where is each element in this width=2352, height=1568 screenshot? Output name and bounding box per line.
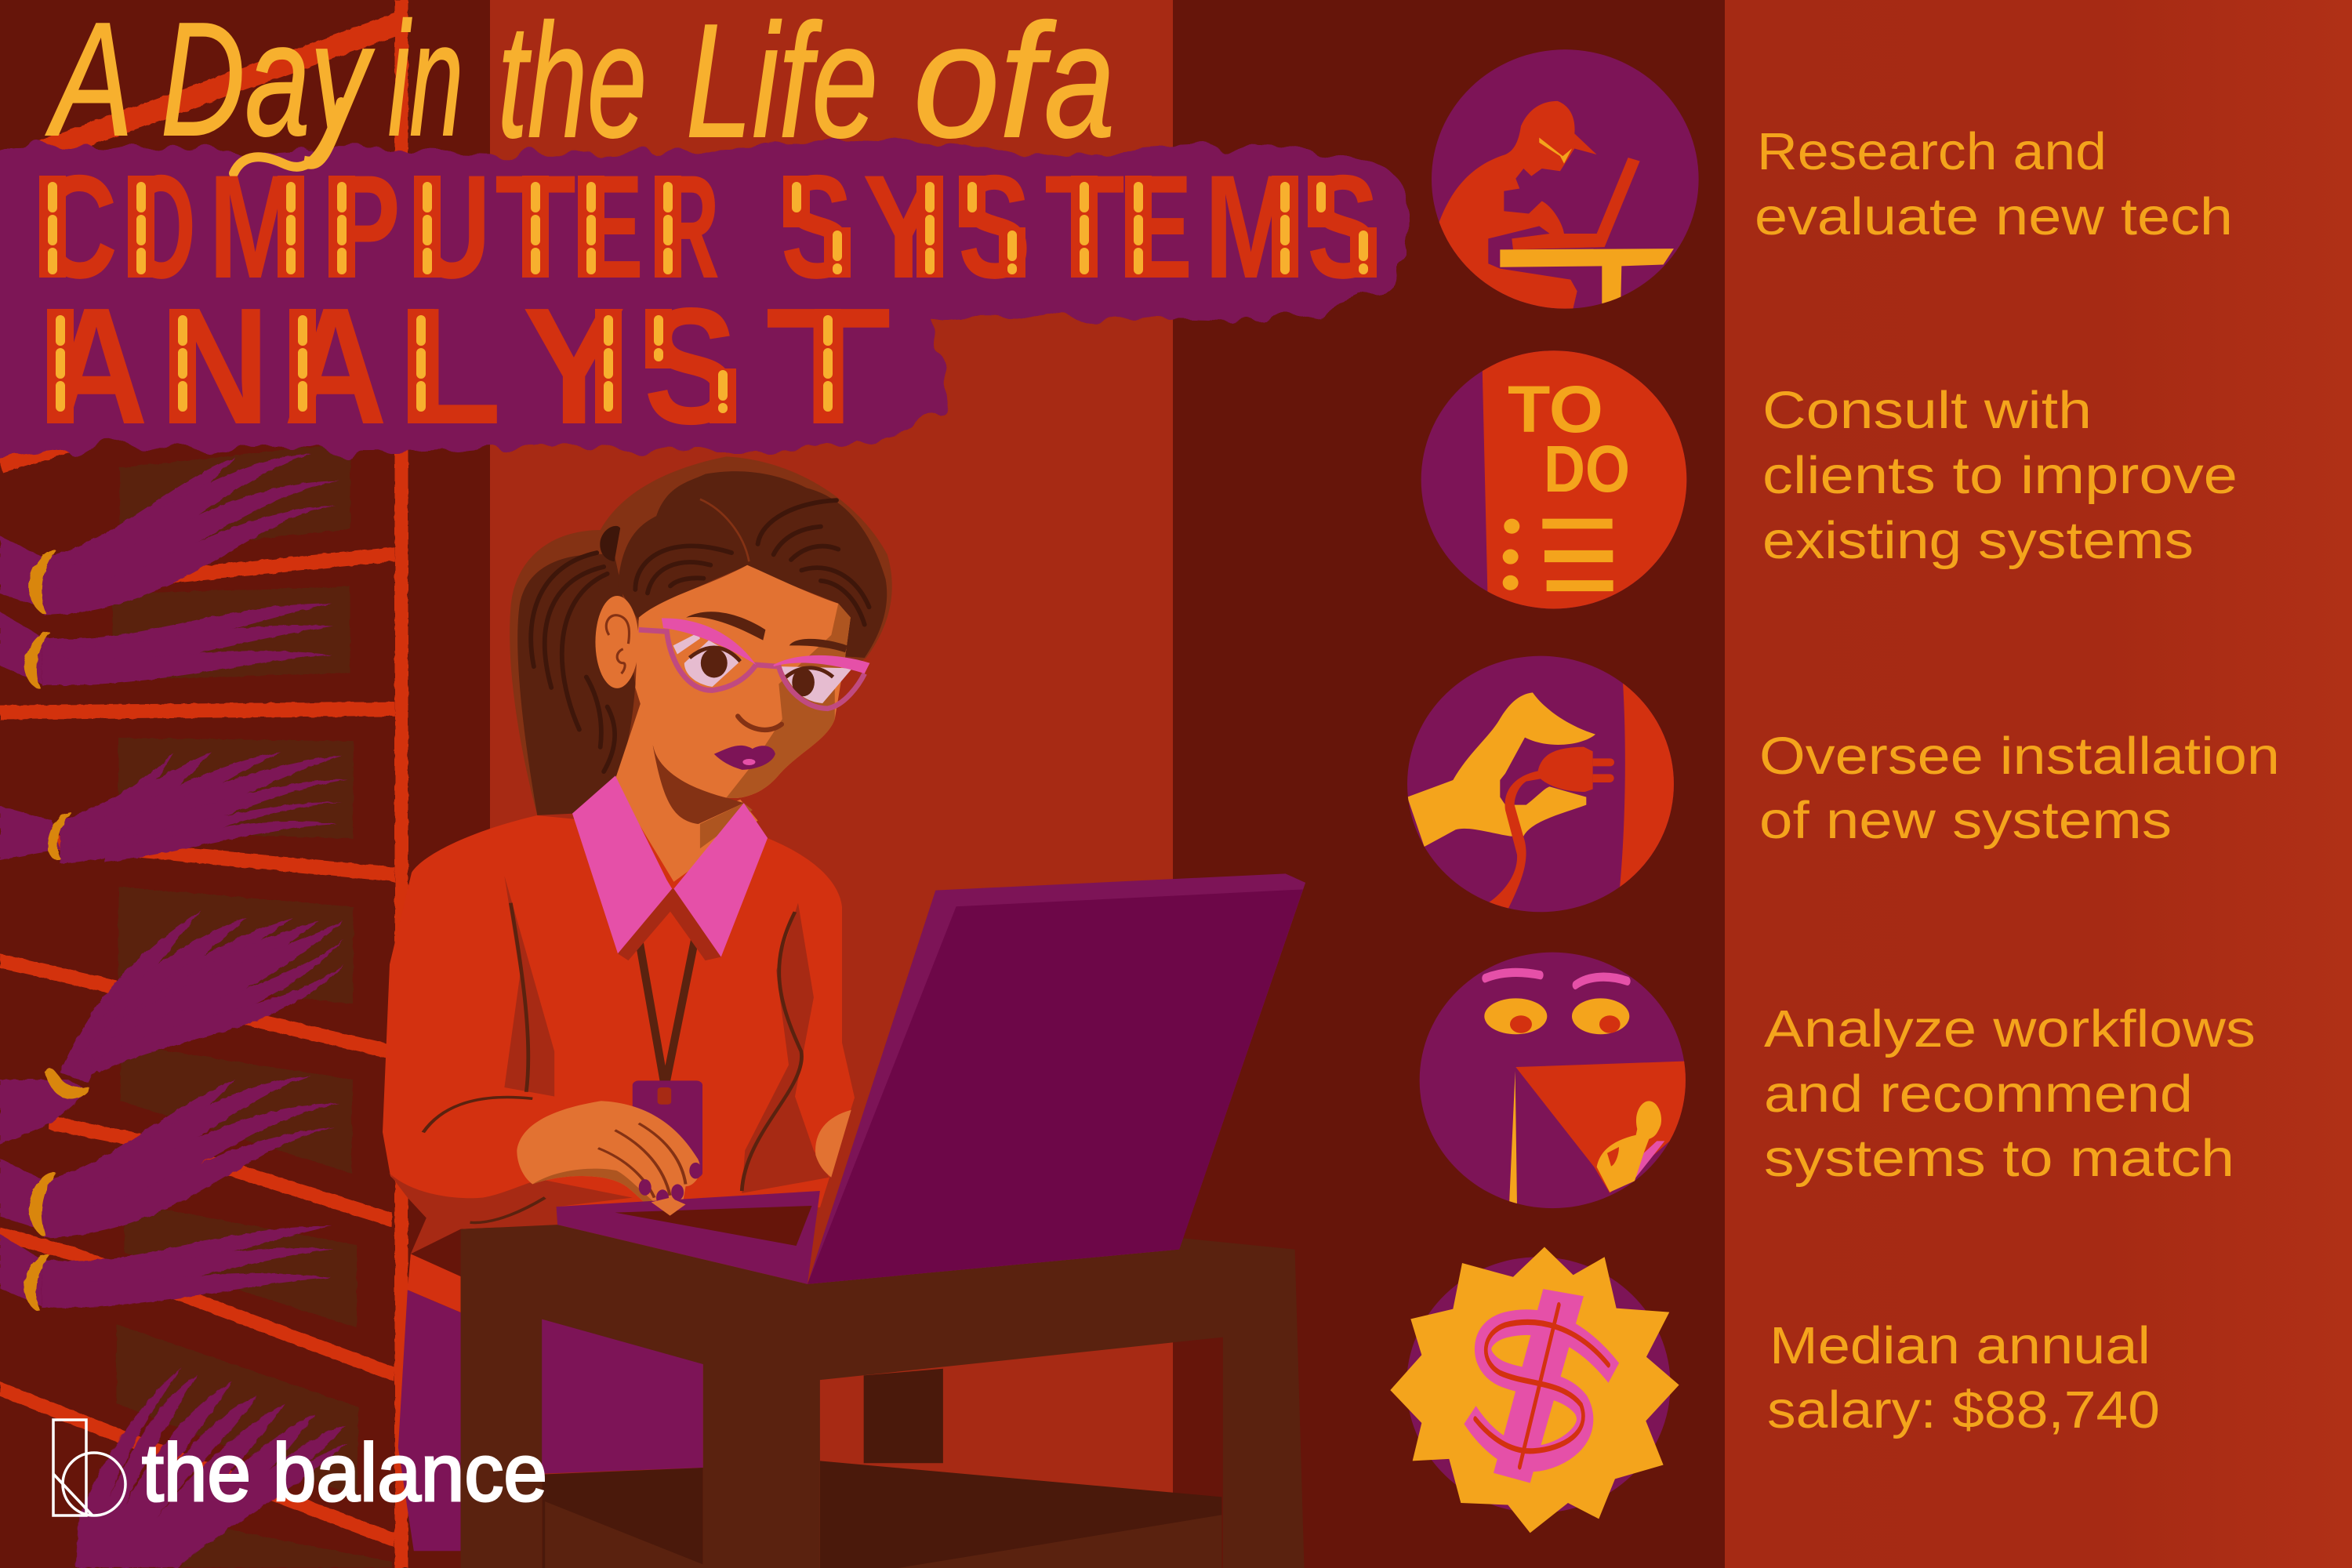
desk back leg and shelf xyxy=(542,1369,1221,1568)
trousers xyxy=(398,1290,703,1551)
list item: salary: salary: $88,740 xyxy=(1767,1381,2160,1439)
title: computer systems: T xyxy=(1044,144,1125,309)
title: analyst: A xyxy=(284,273,387,459)
lanyard xyxy=(637,923,698,1087)
hair parting xyxy=(700,499,749,561)
logo mark xyxy=(53,1420,125,1515)
cable bundles xyxy=(0,453,347,1567)
title: computer systems: E xyxy=(1127,144,1192,309)
title: analyst: T xyxy=(765,273,891,459)
to do label: TO xyxy=(1508,372,1603,446)
background: orange wall panel xyxy=(490,0,1173,1568)
title: computer systems: R xyxy=(657,144,720,309)
lips xyxy=(714,746,775,770)
background: right text panel xyxy=(1725,0,2352,1568)
title: analyst: N xyxy=(166,273,270,459)
title: computer systems: M xyxy=(209,144,302,309)
hair bun tie xyxy=(600,526,620,561)
title: computer systems: E xyxy=(578,144,644,309)
cable tassel 2 xyxy=(0,603,333,688)
cable tassel 6 xyxy=(0,1225,333,1311)
list item: consult: existing systems xyxy=(1762,511,2194,570)
collar xyxy=(572,775,768,957)
list item: research xyxy=(1755,122,2233,246)
left hand xyxy=(517,1101,700,1216)
person: analyst at laptop xyxy=(383,456,892,1551)
title: computer systems: S xyxy=(1307,144,1379,309)
nose xyxy=(738,717,782,730)
hair strands xyxy=(531,500,869,771)
title: computer systems: P xyxy=(328,144,401,309)
title: analyst: Y xyxy=(522,273,626,459)
list item: analyze: and recommend xyxy=(1764,1065,2193,1123)
desk xyxy=(461,1225,1305,1568)
title: analyst: L xyxy=(405,273,502,459)
hair outline xyxy=(510,456,892,815)
title: computer systems: Y xyxy=(862,144,945,309)
to do label xyxy=(1508,372,1630,506)
cable tassel 4 xyxy=(0,910,344,1145)
icon: researcher at laptop xyxy=(1432,49,1699,324)
logo wordmark: the balance xyxy=(142,1428,547,1519)
title: analyst: A xyxy=(45,273,148,459)
title script line xyxy=(45,0,1115,171)
top hair xyxy=(618,471,887,658)
laptop base xyxy=(557,1191,820,1284)
title: computer systems: S xyxy=(781,144,853,309)
ponytail xyxy=(517,554,635,815)
list item: oversee: Oversee installation xyxy=(1759,727,2280,786)
collar shadow xyxy=(618,889,721,960)
title: computer systems: S xyxy=(958,144,1031,309)
title: analyst xyxy=(45,273,891,459)
title: computer systems: M xyxy=(1204,144,1298,309)
title: computer systems: T xyxy=(495,144,576,309)
icon: salary dollar badge xyxy=(1390,1247,1679,1533)
list item: consult: clients to improve xyxy=(1762,446,2238,505)
title: analyst: S xyxy=(644,273,738,459)
server rack xyxy=(0,0,405,1568)
title banner xyxy=(0,143,1408,463)
title: computer systems: C xyxy=(36,144,118,309)
list item: salary: Median annual xyxy=(1769,1316,2151,1375)
list item: analyze: Analyze workflows xyxy=(1764,1000,2256,1058)
to do label: DO xyxy=(1544,432,1630,506)
sweater hem xyxy=(408,1254,461,1312)
id badge xyxy=(633,1080,702,1178)
title: computer systems xyxy=(36,144,1379,309)
face shadow xyxy=(726,604,851,798)
cable tassel 5 xyxy=(0,1076,339,1238)
list item: consult xyxy=(1762,381,2238,570)
head and collar xyxy=(510,456,892,960)
desk and laptop xyxy=(461,873,1305,1568)
keyboard xyxy=(615,1206,812,1246)
list item: oversee: of new systems xyxy=(1759,791,2172,850)
cable tassel 1 xyxy=(0,453,339,615)
sweater body xyxy=(383,815,855,1223)
title: computer systems: U xyxy=(414,144,491,309)
lower body, arms and hand xyxy=(389,876,851,1551)
laptop screen back xyxy=(808,889,1303,1284)
cable tassel 3 xyxy=(0,752,347,864)
sleeve shadows xyxy=(389,876,829,1254)
icon: to do list xyxy=(1421,343,1693,624)
glasses xyxy=(639,630,865,709)
face xyxy=(635,565,851,798)
logo: the balance xyxy=(53,1420,547,1519)
list item: research: evaluate new tech xyxy=(1755,187,2233,246)
cable tassel 7 xyxy=(76,1367,347,1567)
list item: consult: Consult with xyxy=(1762,381,2092,440)
neck xyxy=(616,698,758,882)
list item: research: Research and xyxy=(1757,122,2107,181)
icon: hand with plug xyxy=(1407,656,1683,912)
ear xyxy=(595,596,639,688)
eyebrows xyxy=(686,612,847,652)
title: computer systems: O xyxy=(126,144,196,309)
eyes xyxy=(673,633,852,703)
list item: salary xyxy=(1767,1316,2160,1439)
icon: eyes watching workflow xyxy=(1420,953,1688,1208)
list item: oversee xyxy=(1759,727,2280,850)
list item: analyze: systems to match xyxy=(1764,1129,2234,1188)
right hand xyxy=(815,1110,851,1178)
list item: analyze xyxy=(1764,1000,2256,1188)
fingertips on keyboard xyxy=(652,1198,686,1216)
laptop lid edge xyxy=(808,873,1305,1284)
